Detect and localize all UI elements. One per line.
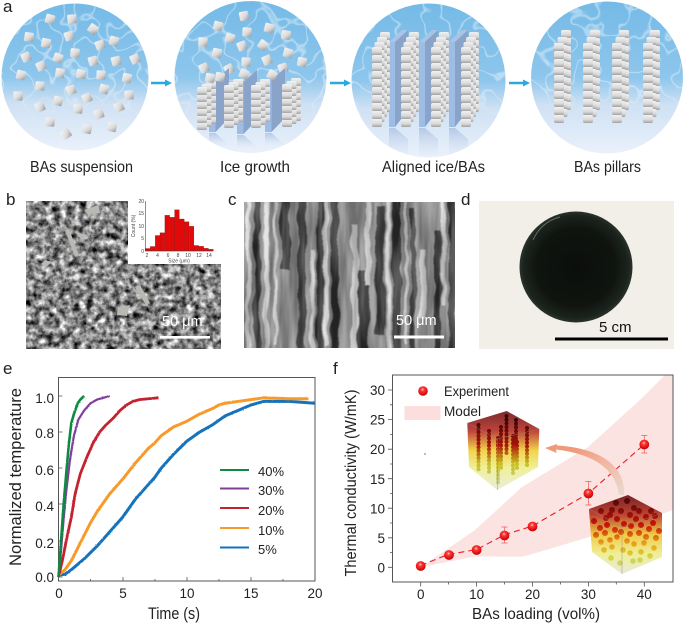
black composite disc (520, 212, 632, 322)
scale bar (160, 336, 210, 339)
curve 30% (58, 396, 110, 577)
label d: d (461, 190, 470, 209)
curve 10% (58, 398, 308, 575)
histogram inset: 6 (167, 253, 170, 259)
circle: aligned ice/BAs (351, 3, 506, 158)
panel f: thermal conductivity chart (333, 359, 673, 623)
label c: c (228, 190, 237, 209)
x tick labels: 15 (243, 586, 259, 601)
y tick labels: 0.0 (35, 570, 54, 585)
y tick labels: 25 (370, 412, 385, 428)
curve 40% (58, 396, 84, 577)
histogram inset: 12 (196, 253, 202, 259)
y tick labels: 1.0 (35, 391, 54, 406)
x axis title: Time (s) (148, 605, 200, 623)
label e: e (3, 359, 12, 378)
curve 20% (58, 398, 158, 577)
curved arrow (545, 444, 624, 495)
step captions (30, 159, 641, 176)
legend: Model (444, 404, 481, 419)
y tick labels: 0 (377, 560, 385, 576)
step captions: BAs pillars (574, 159, 641, 176)
y tick labels: 0.8 (35, 426, 54, 441)
plot frame (392, 375, 673, 582)
y tick labels: 5 (377, 531, 385, 546)
histogram inset: 10 (185, 253, 191, 259)
y tick labels: 15 (370, 472, 385, 487)
x tick labels: 0 (55, 586, 63, 601)
x tick labels: 0 (417, 587, 424, 602)
arrow 2 (330, 80, 351, 86)
step captions: Aligned ice/BAs (382, 159, 485, 176)
histogram inset: 10 (138, 224, 144, 230)
cube: random particles (589, 495, 662, 574)
x tick labels: 10 (179, 586, 195, 601)
step captions: Ice growth (220, 159, 290, 176)
histogram inset: 15 (138, 211, 144, 217)
y tick labels: 30 (370, 383, 385, 398)
step captions: BAs suspension (30, 159, 133, 176)
arrow 3 (509, 80, 530, 86)
y tick labels: 10 (370, 502, 385, 516)
x tick labels: 20 (307, 586, 323, 601)
legend: 20% (258, 503, 284, 518)
x tick labels: 30 (581, 587, 596, 602)
histogram inset: 20 (138, 199, 144, 205)
circle: ice growth (174, 1, 327, 154)
legend (220, 464, 284, 557)
label b: b (6, 190, 15, 209)
aligned micrograph (244, 195, 455, 355)
histogram inset: 0 (141, 249, 144, 255)
panel b: SEM image with histogram (6, 190, 221, 349)
legend: 40% (258, 464, 284, 479)
scale text: 50 μm (162, 314, 203, 330)
y tick labels: 0.2 (35, 536, 54, 551)
x tick labels: 20 (525, 587, 540, 602)
error bars (502, 436, 647, 543)
scale text: 50 μm (396, 313, 437, 329)
plot frame (58, 378, 315, 581)
scale text: 5 cm (599, 319, 632, 336)
legend: Experiment (444, 384, 509, 399)
histogram inset (128, 199, 221, 264)
panel d: composite photo (461, 190, 674, 349)
histogram inset: Count (%) (131, 214, 137, 237)
circle: BAs pillars (531, 1, 684, 154)
ice plates and growing stacks (197, 68, 301, 147)
x tick labels: 5 (119, 586, 127, 601)
y axis title: Normalized temperature (7, 388, 25, 566)
legend: 30% (258, 483, 284, 498)
curve 5% (58, 401, 315, 575)
SEM micrograph (26, 201, 221, 349)
panel c: aligned pillars SEM (228, 190, 455, 355)
y tick labels: 20 (370, 442, 385, 457)
data points (416, 440, 649, 571)
histogram inset: 14 (206, 253, 212, 259)
x tick labels (55, 586, 323, 601)
scale bar (555, 338, 668, 340)
panel e: normalized temperature chart (3, 359, 323, 623)
y axis title: Thermal conductivity (W/mK) (343, 390, 360, 576)
temperature curves (58, 396, 315, 577)
histogram inset: Size (μm) (168, 258, 190, 264)
x tick labels (417, 587, 652, 602)
stray dot (424, 453, 426, 455)
axis ticks (388, 390, 644, 586)
y tick labels: 0.6 (35, 463, 54, 478)
histogram inset: 8 (177, 253, 180, 259)
dashed trend line (421, 444, 644, 566)
x axis title: BAs loading (vol%) (472, 606, 600, 623)
model band (421, 375, 673, 567)
photo background (479, 201, 674, 349)
legend: 5% (258, 542, 277, 557)
y tick labels (370, 383, 385, 576)
circle: BAs suspension (0, 3, 150, 151)
legend (404, 384, 509, 420)
x tick labels: 40 (637, 587, 652, 602)
y tick labels: 0.4 (35, 499, 54, 514)
histogram inset: 2 (146, 253, 149, 259)
histogram inset: 4 (156, 253, 159, 259)
panel a: freeze-casting schematic (0, 0, 684, 176)
y tick labels (35, 391, 54, 585)
label f: f (333, 359, 338, 378)
cube: aligned pillars (467, 411, 539, 490)
histogram inset: 5 (141, 236, 144, 242)
legend: 10% (258, 523, 284, 538)
axis ticks (58, 396, 283, 581)
x tick labels: 10 (469, 587, 484, 602)
arrow 1 (151, 80, 172, 86)
scale bar (394, 336, 444, 338)
